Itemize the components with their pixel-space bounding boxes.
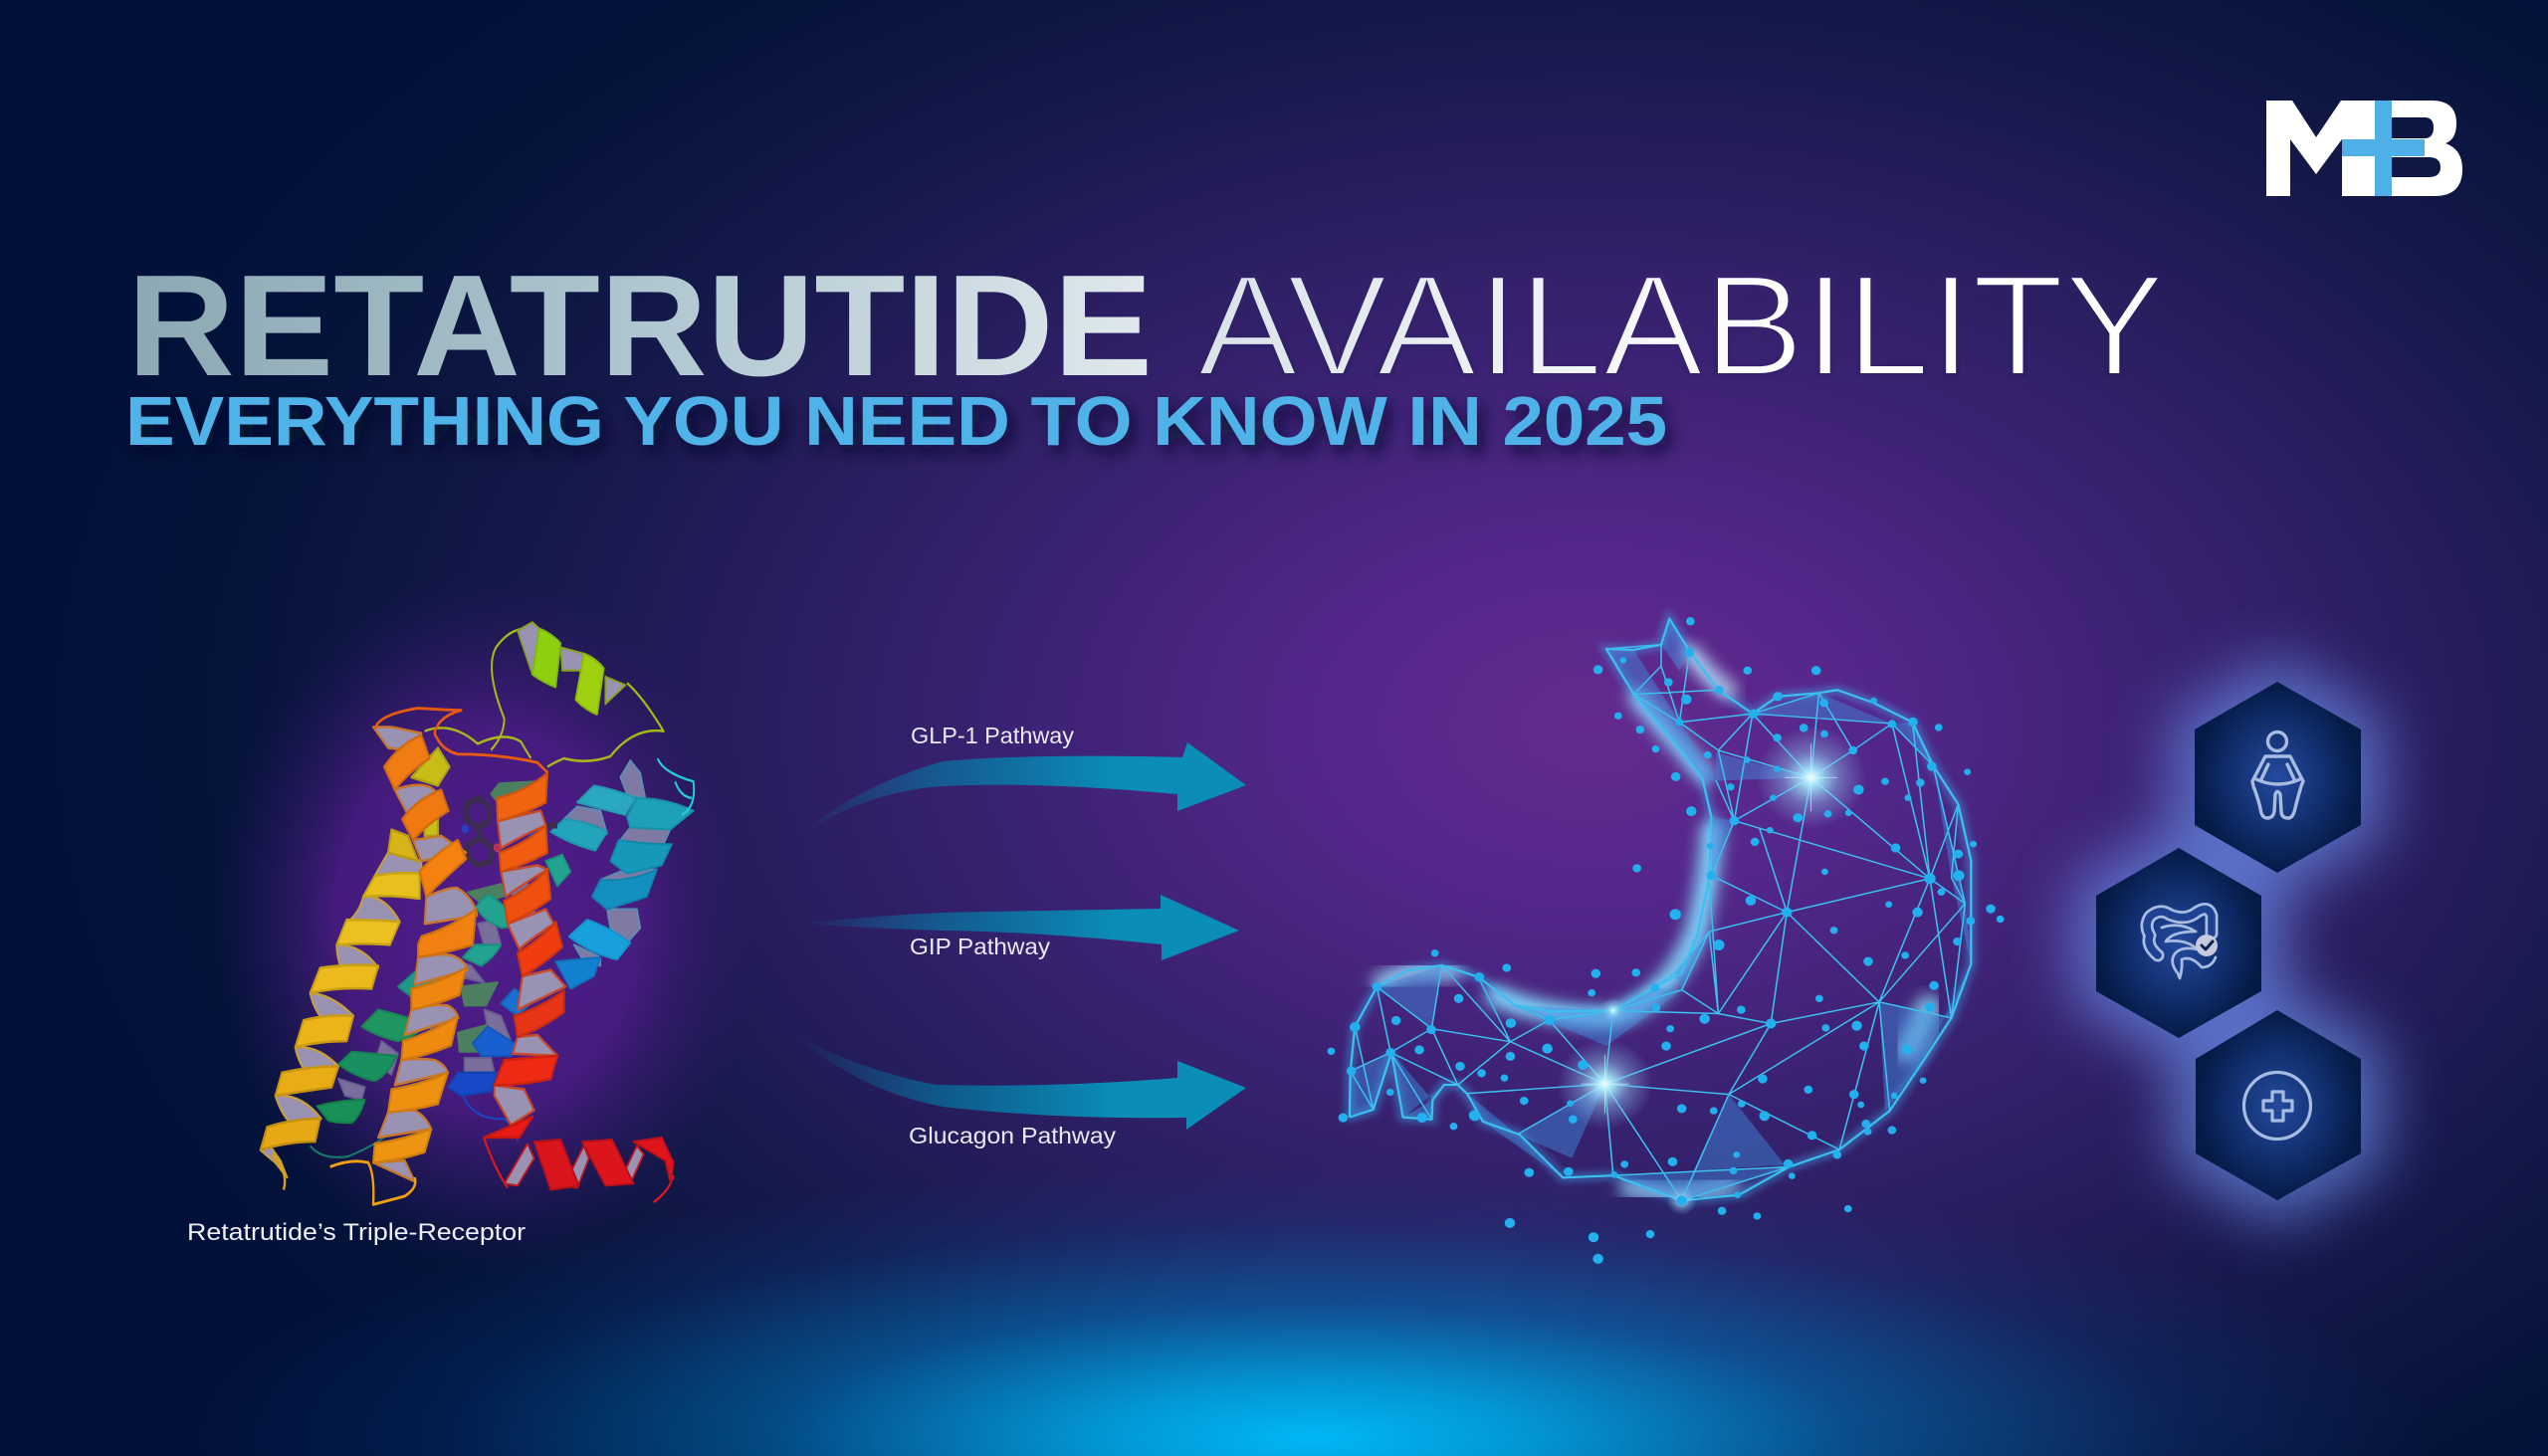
red-orange helix bbox=[375, 709, 565, 1138]
protein: receptor ribbon structure bbox=[261, 622, 694, 1204]
glow behind protein bbox=[214, 572, 761, 1269]
icon: circled plus bbox=[2243, 1073, 2311, 1139]
icon: waist measure person bbox=[2252, 732, 2303, 818]
label: GLP-1 Pathway: GLP-1 Pathway bbox=[911, 723, 1074, 748]
stomach sparkle hubs bbox=[1557, 726, 1866, 1215]
subtitle: EVERYTHING YOU NEED TO KNOW IN 2025 bbox=[125, 382, 1667, 460]
label: Glucagon Pathway: Glucagon Pathway bbox=[909, 1123, 1117, 1148]
hexagon glow bbox=[2072, 657, 2383, 1225]
title: RETATRUTIDE: RETATRUTIDE bbox=[127, 245, 1153, 406]
stomach glows bbox=[1350, 619, 1971, 1200]
stomach particles bbox=[1328, 618, 2004, 1263]
orange helix bbox=[330, 727, 477, 1204]
arrow: Glucagon pathway bbox=[796, 1035, 1246, 1130]
title: AVAILABILITY: AVAILABILITY bbox=[1197, 245, 2165, 406]
yellow helix bbox=[261, 748, 450, 1190]
lime domain and loops bbox=[425, 622, 664, 766]
arrow: GIP pathway bbox=[803, 895, 1239, 960]
arrow: GLP-1 pathway bbox=[799, 742, 1246, 836]
stomach mesh lines bbox=[1350, 619, 1971, 1200]
caption: Retatrutide's Triple-Receptor: Retatrutide’s Triple-Receptor bbox=[187, 1219, 526, 1246]
icon hexagon: weight loss bbox=[2195, 682, 2361, 873]
logo: M+B bbox=[2266, 101, 2462, 196]
label: GIP Pathway: GIP Pathway bbox=[910, 934, 1051, 959]
red horizontal helix bbox=[484, 1138, 674, 1202]
stomach facets bbox=[1350, 619, 1971, 1200]
ligand molecule bbox=[463, 798, 557, 865]
stomach: low-poly network bbox=[1328, 618, 2004, 1263]
icon hexagon: medical plus bbox=[2196, 1010, 2361, 1200]
icon hexagon: gut health bbox=[2096, 848, 2261, 1038]
teal and blue rear helices bbox=[311, 781, 570, 1157]
cyan helix bbox=[550, 758, 694, 989]
title bbox=[127, 245, 2165, 406]
icon: intestines with check bbox=[2147, 909, 2218, 978]
